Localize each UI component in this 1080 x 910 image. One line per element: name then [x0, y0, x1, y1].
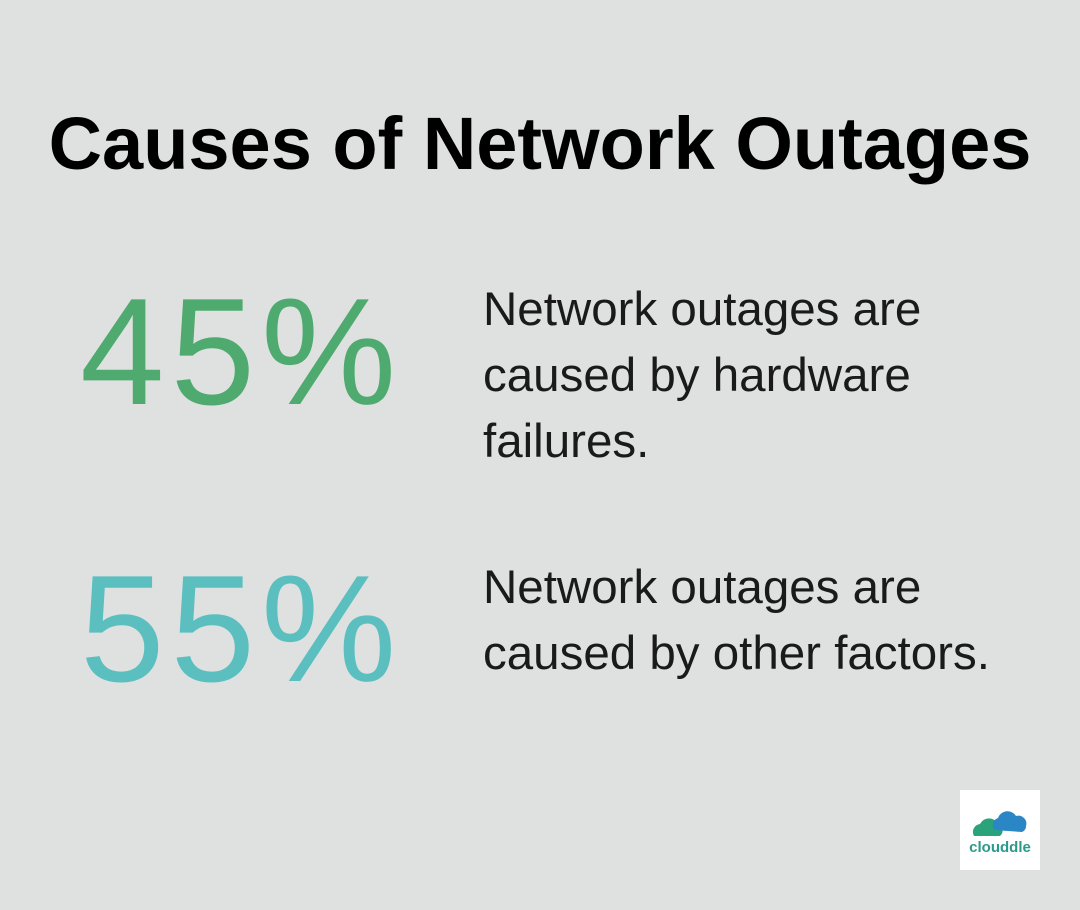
stat: 45%: 45% [80, 267, 402, 437]
logo: clouddle: clouddle [969, 839, 1031, 856]
text: other factors [483, 561, 990, 680]
text: hardware failures: caused by hardware [483, 349, 911, 402]
text: other factors: caused by other factors. [483, 627, 990, 680]
text: hardware failures [483, 283, 921, 468]
text: hardware failures: failures. [483, 415, 649, 468]
text: hardware failures: Network outages are [483, 283, 921, 336]
stat: 55%: 55% [80, 544, 402, 714]
logo: clouddle [960, 790, 1040, 870]
title: Causes of Network Outages [49, 102, 1031, 185]
text: other factors: Network outages are [483, 561, 921, 614]
